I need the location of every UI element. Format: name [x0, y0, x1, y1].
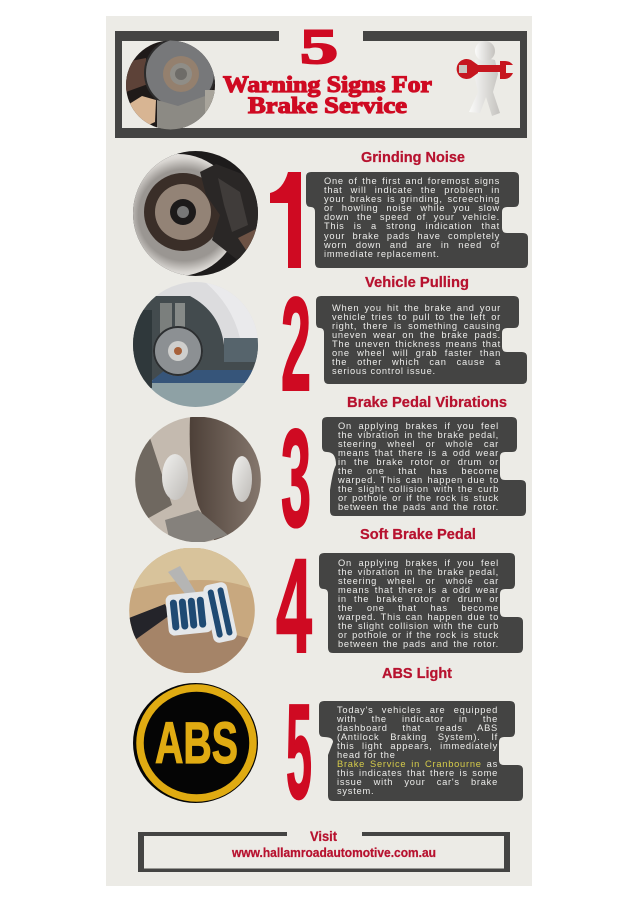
- body text: (Antilock Braking System). If: [337, 732, 498, 742]
- header frame: [115, 31, 527, 138]
- title number 5: 5: [300, 18, 338, 74]
- section 4: soft brake pedal: [129, 527, 523, 681]
- body text: with the indicator in the: [337, 714, 498, 724]
- panel: paper background: [106, 16, 532, 886]
- body text: means that there is a odd wear: [338, 448, 499, 458]
- section 2: vehicle pulling: 2: [281, 271, 311, 419]
- body text: means that there is a odd wear: [338, 585, 499, 595]
- footer panel: [138, 829, 510, 872]
- body text: [324, 177, 500, 261]
- text block shape: [306, 172, 528, 268]
- body text: dashboard that reads ABS: [337, 723, 498, 733]
- body text: The uneven thickness means that: [332, 339, 501, 349]
- body text: This is a strong indication that: [324, 221, 500, 231]
- text block shape: [319, 553, 523, 653]
- body text: the other which can cause a: [332, 357, 501, 367]
- body text: [338, 558, 499, 652]
- body text: one wheel will grab faster than: [332, 348, 501, 358]
- body text: system.: [337, 786, 374, 796]
- body text: down the speed of your vehicle.: [324, 212, 500, 222]
- section 3: brake pedal vibrations: 3: [281, 401, 311, 556]
- body text: steering wheel or whole car: [338, 439, 499, 449]
- title: [223, 72, 432, 118]
- body text: or pothole or if the rock is stuck: [338, 630, 499, 640]
- body text: head for the: [337, 750, 396, 760]
- body text: warped. This can happen due to: [338, 475, 499, 485]
- photo: brake disc and caliper: [133, 151, 258, 276]
- body text: in the brake rotor or drum or: [338, 594, 499, 604]
- icon: ABS warning light: ABS: [155, 711, 238, 776]
- title: Brake Service: [248, 93, 407, 118]
- body text: steering wheel or whole car: [338, 576, 499, 586]
- body text: the vibration in the brake pedal,: [338, 567, 499, 577]
- body text: right, there is something causing: [332, 321, 501, 331]
- body text: this light appears, immediately: [337, 741, 498, 751]
- text block shape: [322, 417, 526, 516]
- heading: Soft Brake Pedal: [360, 527, 476, 543]
- body text: or pothole or if the rock is stuck: [338, 493, 499, 503]
- body text: serious control issue.: [332, 366, 436, 376]
- icon: figure holding wrench: [457, 41, 513, 116]
- body text: the vibration in the brake pedal,: [338, 430, 499, 440]
- heading: Grinding Noise: [361, 150, 465, 166]
- body text: the slight collision with the curb: [338, 484, 499, 494]
- number 1: [270, 172, 301, 268]
- body text: the one that has become: [338, 603, 499, 613]
- website url: www.hallamroadautomotive.com.au: [231, 846, 436, 860]
- icon: ABS warning light: [133, 683, 258, 803]
- body text: that will indicate the problem in: [324, 185, 500, 195]
- heading: Vehicle Pulling: [365, 275, 469, 291]
- body text: the one that has become: [338, 466, 499, 476]
- section 5: abs light: 5: [286, 676, 312, 827]
- header panel: [115, 18, 527, 138]
- body text: worn down and are in need of: [324, 240, 500, 250]
- section 1: grinding noise: [117, 150, 528, 276]
- visit label: Visit: [310, 829, 337, 844]
- body text: this indicates that there is some: [337, 768, 498, 778]
- footer frame: [138, 832, 510, 872]
- photo: pedals in footwell: [135, 417, 261, 542]
- photo: blue striped pedals: [129, 548, 255, 673]
- section 4: soft brake pedal: 4: [276, 532, 312, 681]
- body text: issue with your car's brake: [337, 777, 498, 787]
- body text: uneven wear on the brake pads.: [332, 330, 501, 340]
- body text: immediate replacement.: [324, 249, 440, 259]
- title: Warning Signs For: [223, 72, 432, 97]
- body text: Brake Service in Cranbourne as: [337, 759, 498, 769]
- text block shape: [319, 701, 523, 801]
- body text: between the pads and the rotor.: [338, 502, 499, 512]
- body text: vehicle tries to pull to the left or: [332, 312, 501, 322]
- body text: between the pads and the rotor.: [338, 639, 499, 649]
- body text: your brake pads have completely: [324, 231, 500, 241]
- heading: ABS Light: [382, 666, 452, 682]
- body text: your brakes is grinding, screeching: [324, 194, 500, 204]
- section 3: brake pedal vibrations: [135, 395, 526, 556]
- body text: [332, 304, 501, 378]
- body text: in the brake rotor or drum or: [338, 457, 499, 467]
- text block shape: [316, 296, 527, 384]
- heading: Brake Pedal Vibrations: [347, 395, 507, 411]
- section 2: vehicle pulling: [133, 276, 527, 407]
- body text: or howling noise while you slow: [324, 203, 500, 213]
- body text: [338, 422, 499, 514]
- section 5: abs light: [133, 666, 523, 827]
- photo: car wheel hub: [133, 282, 258, 407]
- body text: the slight collision with the curb: [338, 621, 499, 631]
- header photo: brake rotor: [126, 38, 215, 130]
- body text: warped. This can happen due to: [338, 612, 499, 622]
- body text: [337, 706, 498, 798]
